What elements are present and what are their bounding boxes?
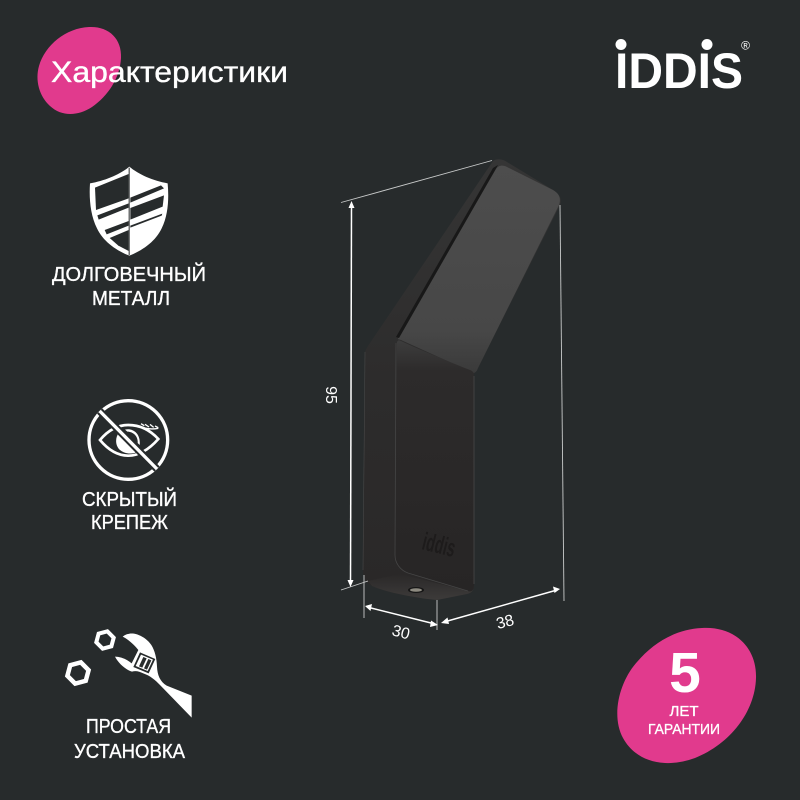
- label: СКРЫТЫЙ КРЕПЕЖ: КРЕПЕЖ: [91, 512, 168, 534]
- label: СКРЫТЫЙ КРЕПЕЖ: СКРЫТЫЙ: [82, 487, 177, 511]
- icon: nuts and wrench: [66, 629, 192, 718]
- icon: shield: [90, 167, 168, 256]
- warranty label: [648, 703, 720, 738]
- engraved logo on hook: iddis: [420, 528, 458, 563]
- hook bottom lip: [368, 574, 474, 600]
- label: СКРЫТЫЙ КРЕПЕЖ: [82, 487, 177, 534]
- dimension: depth 30: 30: [390, 622, 412, 644]
- warranty label: ЛЕТ: [669, 703, 699, 720]
- label: ПРОСТАЯ УСТАНОВКА: [74, 716, 186, 763]
- dimension: height 95: [322, 201, 354, 587]
- logo: IDDIS: IDDIS: [615, 43, 743, 99]
- label: ПРОСТАЯ УСТАНОВКА: ПРОСТАЯ: [86, 716, 171, 738]
- label: ДОЛГОВЕЧНЫЙ МЕТАЛЛ: МЕТАЛЛ: [92, 288, 170, 310]
- label: ДОЛГОВЕЧНЫЙ МЕТАЛЛ: [52, 262, 206, 310]
- hook upper face: [398, 166, 560, 373]
- screw: [408, 587, 424, 593]
- feature: easy installation: [66, 629, 192, 763]
- hook back plate: [363, 159, 561, 600]
- icon: crossed-out eye: [89, 401, 168, 479]
- label: ПРОСТАЯ УСТАНОВКА: УСТАНОВКА: [74, 741, 186, 763]
- dimension: width 38: 38: [494, 612, 516, 633]
- dimension: width 38: [441, 586, 560, 633]
- dimension: height 95: 95: [322, 386, 339, 404]
- warranty number: 5: [669, 641, 701, 705]
- feature: durable metal: [52, 167, 206, 310]
- heading: Характеристики: Характеристики: [51, 56, 288, 89]
- dimension: depth 30: [365, 604, 438, 644]
- label: ДОЛГОВЕЧНЫЙ МЕТАЛЛ: ДОЛГОВЕЧНЫЙ: [52, 262, 206, 286]
- feature: hidden fastening: [82, 401, 177, 534]
- warranty badge: [617, 628, 756, 763]
- warranty label: ГАРАНТИИ: [648, 721, 720, 738]
- heading: Характеристики: [37, 27, 288, 114]
- product: wall hook: [363, 159, 561, 600]
- dimension lines: [341, 160, 564, 630]
- logo: IDDIS: ®: [741, 38, 750, 52]
- hook lower face: [395, 340, 474, 591]
